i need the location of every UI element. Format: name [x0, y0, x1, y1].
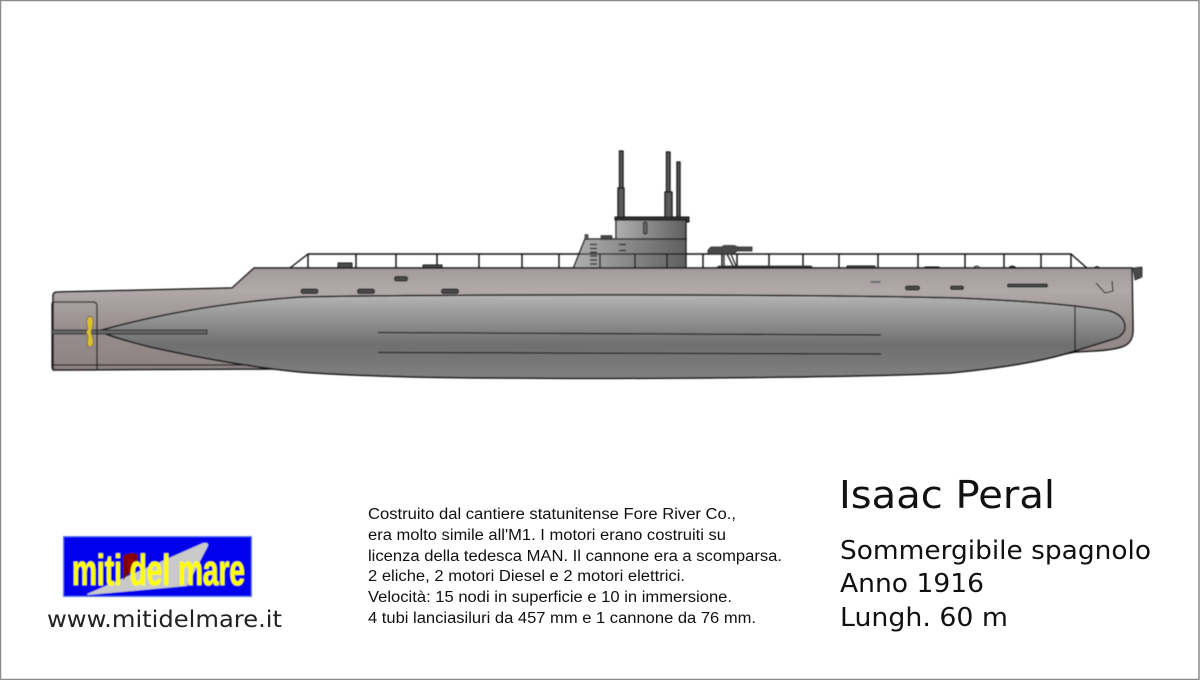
outer hull [53, 268, 1133, 370]
rudder [52, 302, 250, 370]
title: Isaac Peral [839, 473, 1055, 517]
logo: miti del mare [64, 536, 252, 596]
propeller [86, 316, 93, 347]
deck gun [708, 246, 814, 269]
description text block: licenza della tedesca MAN. Il cannone era a scomparsa. [368, 548, 782, 565]
ship specifications: Lungh. 60 m [840, 603, 1008, 633]
submarine side profile [52, 151, 1142, 378]
saddle ballast tank [98, 295, 1125, 378]
periscopes and masts [618, 151, 680, 218]
ship specifications: Sommergibile spagnolo [840, 536, 1151, 566]
description text block: Velocità: 15 nodi in superficie e 10 in immersione. [368, 589, 732, 606]
description text block [368, 506, 782, 627]
deck fittings [338, 263, 1100, 269]
ship specifications: Anno 1916 [840, 569, 984, 599]
logo red sail [123, 553, 138, 580]
description text block: 2 eliche, 2 motori Diesel e 2 motori elettrici. [368, 568, 685, 585]
tank bow seam [1074, 306, 1076, 351]
stem head [1133, 267, 1142, 280]
tank seams [378, 332, 881, 354]
website address: www.mitidelmare.it [47, 607, 282, 633]
railing [290, 254, 1088, 269]
conning tower [573, 217, 689, 269]
hull portholes [301, 276, 1048, 294]
anchor recess [1096, 281, 1113, 293]
description text block: Costruito dal cantiere statunitense Fore River Co., [368, 506, 736, 523]
description text block: era molto simile all'M1. I motori erano costruiti su [368, 527, 726, 544]
propeller shaft [52, 330, 207, 334]
logo swoosh [87, 543, 208, 595]
ship specifications [840, 536, 1151, 633]
logo wordmark: miti del mare [72, 546, 245, 595]
description text block: 4 tubi lanciasiluri da 457 mm e 1 cannone da 76 mm. [368, 610, 756, 627]
